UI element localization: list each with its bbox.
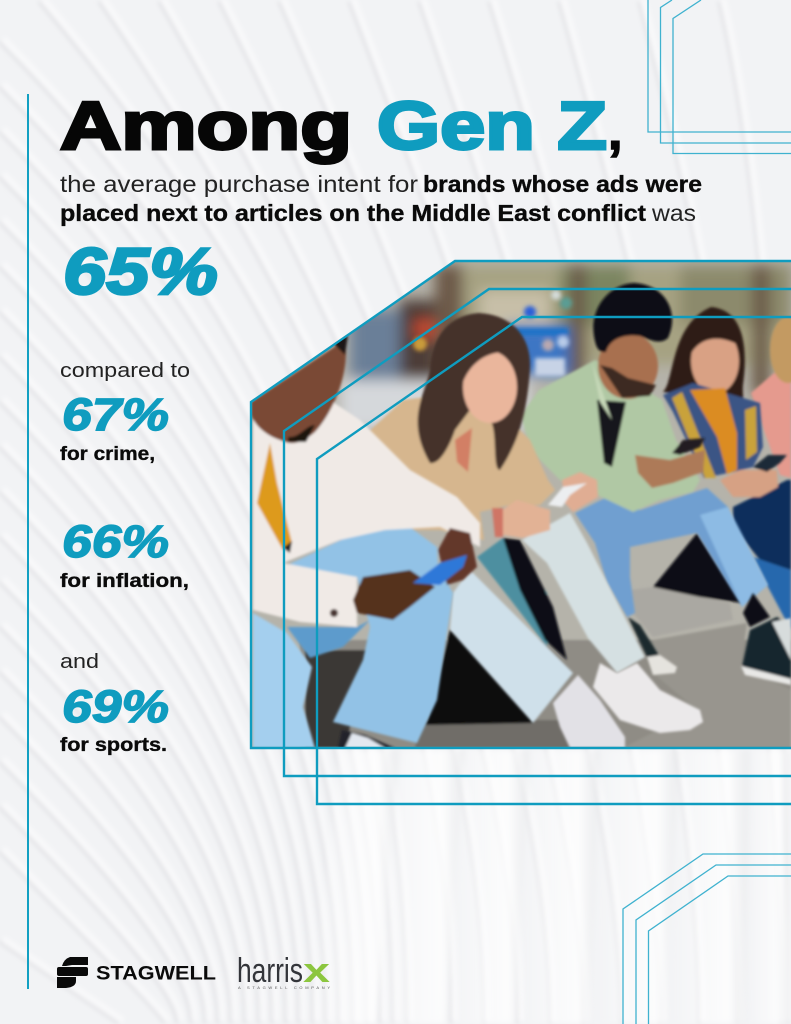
photo: young people on steps using phones: [251, 261, 791, 750]
person 3: green shirt and jeans: [521, 283, 768, 675]
comparison: sports: and: [60, 651, 99, 673]
person 1: white fleece jacket and blue jeans: [251, 335, 480, 748]
comparison: sports: [60, 651, 169, 756]
bottom-right outline decoration: [623, 854, 791, 1024]
intro text: brands whose ads were: [423, 171, 702, 197]
title: ,: [608, 103, 622, 161]
logo: Stagwell: [57, 957, 216, 988]
intro text: [60, 171, 702, 226]
top-right outline decoration: [648, 0, 791, 154]
title: [60, 88, 622, 164]
comparison: crime: 67%: [62, 389, 169, 440]
logo: HarrisX: harris: [237, 952, 303, 990]
title: Among: [60, 88, 352, 164]
intro text: the average purchase intent for: [60, 171, 418, 197]
person 2: beige jacket and pale jeans: [340, 313, 645, 723]
white sneakers: [553, 663, 703, 748]
main stat 65%: 65%: [63, 234, 218, 308]
comparison: inflation: for inflation,: [60, 571, 189, 592]
comparison: crime: for crime,: [60, 444, 155, 465]
title: Gen Z: [377, 88, 607, 164]
logo: HarrisX: x: [303, 952, 330, 990]
intro text: placed next to articles on the Middle East conflict: [60, 200, 646, 226]
comparison: crime: [60, 360, 190, 465]
image frame outlines: [251, 261, 791, 804]
vertical accent line: [27, 94, 29, 989]
dark sneaker: [741, 593, 791, 685]
intro text: was: [651, 200, 696, 226]
person 4: plaid shirt: [663, 307, 791, 630]
stone steps: [300, 533, 791, 750]
street bokeh: [413, 290, 572, 376]
comparison: sports: for sports.: [60, 735, 167, 756]
logo: HarrisX: A STAGWELL COMPANY: [238, 985, 330, 990]
comparison: inflation: [60, 516, 189, 592]
comparison: crime: compared to: [60, 360, 190, 382]
person 5: pink top: [751, 317, 791, 478]
comparison: inflation: 66%: [62, 516, 169, 567]
logo: Stagwell: STAGWELL: [96, 964, 216, 984]
comparison: sports: 69%: [62, 681, 169, 732]
icon: Stagwell mark: [57, 957, 88, 988]
